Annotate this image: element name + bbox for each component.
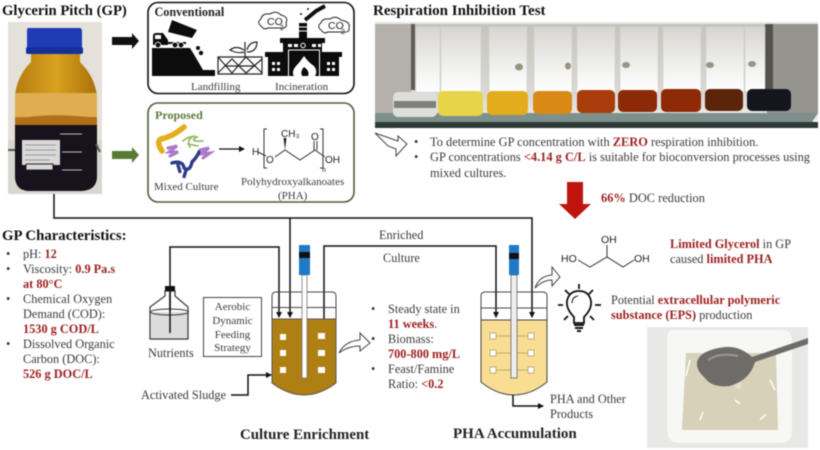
arrow: culture to PHA	[219, 148, 244, 150]
label: Proposed: Proposed	[155, 108, 203, 122]
diagram: glycerol structure: OH	[601, 234, 617, 246]
text block: GP characteristics list: at 80°C	[23, 277, 62, 291]
photo: respiration inhibition beakers	[375, 22, 818, 128]
diagram: PHA chemical structure: O	[311, 132, 319, 143]
heading: Culture Enrichment: Culture Enrichment	[240, 427, 369, 443]
text block: enrichment results: •	[371, 302, 375, 316]
text block: enrichment results: Feast/Famine	[388, 362, 455, 376]
box: aerobic dynamic feeding strategy	[204, 298, 262, 356]
box: aerobic dynamic feeding strategy: Aerobic	[215, 301, 250, 313]
panel: conventional	[148, 2, 354, 94]
label: Polyhydroxyalkanoates (PHA)	[241, 176, 344, 202]
box: aerobic dynamic feeding strategy: Feeding	[215, 329, 251, 341]
diagram: glycerol structure: HO	[561, 253, 577, 265]
heading: PHA Accumulation: PHA Accumulation	[453, 426, 577, 442]
icon: light bulb	[558, 284, 601, 331]
label: Culture: Culture	[383, 251, 420, 265]
text block: GP characteristics list: •	[6, 292, 10, 306]
icon: landfill truck	[152, 20, 215, 76]
text block: respiration findings: GP concentrations <4.14 g C/L is suitable for bioconversion processes using	[430, 150, 810, 164]
label: PHA and other products	[550, 392, 626, 421]
label: Enriched: Enriched	[379, 228, 423, 242]
text block: respiration findings	[414, 135, 810, 180]
text block: enrichment results	[371, 302, 460, 391]
diagram: PHA chemical structure: CH₃	[281, 129, 300, 140]
text block: respiration findings: •	[414, 150, 418, 164]
heading: GP Characteristics: GP Characteristics:	[2, 228, 127, 244]
icon: CO2 cloud left: 2	[280, 25, 284, 32]
label: Landfilling: Landfilling	[191, 81, 241, 93]
arrow: hollow arrow to enrichment results	[339, 333, 370, 353]
text block: GP characteristics list: Viscosity: 0.9 Pa.s	[23, 262, 115, 276]
label: Nutrients: Nutrients	[148, 346, 194, 360]
arrow: hollow arrow to bullets	[375, 133, 407, 156]
text block: GP characteristics list: Dissolved Organic	[23, 337, 115, 351]
process line: nutrients feed	[170, 247, 279, 333]
diagram: PHA chemical structure: O	[266, 155, 274, 166]
label: DOC reduction: 66% DOC reduction	[601, 191, 705, 205]
reactor: culture enrichment	[272, 245, 336, 395]
box: aerobic dynamic feeding strategy: Strategy	[214, 342, 251, 354]
label: Mixed Culture: Mixed Culture	[154, 181, 219, 193]
photo: glycerin pitch bottle	[8, 22, 102, 194]
heading: Glycerin Pitch: Glycerin Pitch (GP)	[2, 3, 127, 19]
label: Polyhydroxyalkanoates (PHA): (PHA)	[278, 190, 308, 202]
text block: GP characteristics list: Carbon (DOC):	[23, 352, 100, 366]
icon: incinerator factory	[259, 6, 349, 76]
text block: GP characteristics list: •	[6, 337, 10, 351]
arrow: hollow arrow to glycerol	[535, 267, 560, 288]
text block: GP characteristics list: •	[6, 247, 10, 261]
diagram: PHA chemical structure	[252, 129, 340, 174]
diagram: PHA chemical structure: n	[322, 167, 326, 174]
text block: enrichment results: Steady state in	[388, 302, 460, 316]
label: PHA and other products: PHA and Other	[550, 392, 626, 406]
text block: respiration findings: mixed cultures.	[430, 166, 506, 180]
icon: CO2 cloud right	[319, 17, 349, 36]
text block: GP characteristics list	[6, 247, 115, 381]
icon: plant on soil	[218, 42, 262, 74]
text block: potential EPS: substance (EPS) production	[611, 308, 752, 322]
text block: enrichment results: •	[371, 332, 375, 346]
icon: CO2 cloud left: CO	[267, 16, 283, 28]
text block: GP characteristics list: 526 g DOC/L	[23, 367, 93, 381]
text block: respiration findings: •	[414, 135, 418, 149]
process line: GP feed	[54, 194, 532, 317]
text block: enrichment results: •	[371, 362, 375, 376]
icon: mixed culture microbes	[159, 127, 210, 177]
text block: GP characteristics list: pH: 12	[23, 247, 57, 261]
label: Polyhydroxyalkanoates (PHA): Polyhydroxyalkanoates	[241, 176, 344, 188]
reactor: PHA accumulation	[481, 245, 547, 395]
label: Conventional: Conventional	[154, 5, 225, 19]
text block: enrichment results: Biomass:	[388, 332, 434, 346]
photo: EPS on spoon	[647, 327, 808, 448]
text block: limited glycerol: caused limited PHA	[670, 252, 773, 266]
arrow: activated sludge input	[231, 375, 271, 395]
box: aerobic dynamic feeding strategy: Dynamic	[212, 315, 253, 327]
text block: enrichment results: 700-800 mg/L	[388, 347, 460, 361]
label: Activated Sludge: Activated Sludge	[141, 388, 227, 402]
text block: GP characteristics list: Chemical Oxygen	[23, 292, 112, 306]
label: PHA and other products: Products	[550, 407, 593, 421]
icon: nutrients bottle	[150, 286, 188, 339]
text block: potential EPS	[611, 293, 781, 322]
icon: CO2 cloud right: 2	[341, 29, 345, 36]
text block: GP characteristics list: 1530 g COD/L	[23, 322, 99, 336]
arrow: black to conventional	[112, 33, 139, 49]
diagram: glycerol structure: OH	[634, 253, 650, 265]
text block: limited glycerol: Limited Glycerol in GP	[670, 237, 791, 251]
heading: Respiration Inhibition Test: Respiration Inhibition Test	[373, 3, 546, 19]
text block: respiration findings: To determine GP concentration with ZERO respiration inhibition.	[430, 135, 758, 149]
text block: limited glycerol	[670, 237, 791, 266]
arrow: PHA product output	[513, 395, 543, 406]
process line: enriched culture transfer	[324, 246, 496, 319]
panel: proposed	[148, 103, 354, 202]
diagram: PHA chemical structure: OH	[325, 155, 340, 166]
text block: potential EPS: Potential extracellular polymeric	[611, 293, 781, 307]
text block: enrichment results: Ratio: <0.2	[388, 377, 444, 391]
icon: CO2 cloud right: CO	[328, 20, 344, 32]
text block: enrichment results: 11 weeks.	[388, 317, 437, 331]
arrow: green to proposed	[112, 147, 139, 163]
arrow: red down arrow	[559, 182, 591, 219]
label: Incineration: Incineration	[275, 81, 329, 93]
icon: CO2 cloud left	[259, 12, 287, 32]
diagram: glycerol structure	[561, 234, 650, 267]
text block: GP characteristics list: •	[6, 262, 10, 276]
arrow: GP feed into enrichment reactor	[289, 218, 291, 317]
text block: GP characteristics list: Demand (COD):	[23, 307, 105, 321]
diagram: PHA chemical structure: H	[252, 147, 259, 158]
